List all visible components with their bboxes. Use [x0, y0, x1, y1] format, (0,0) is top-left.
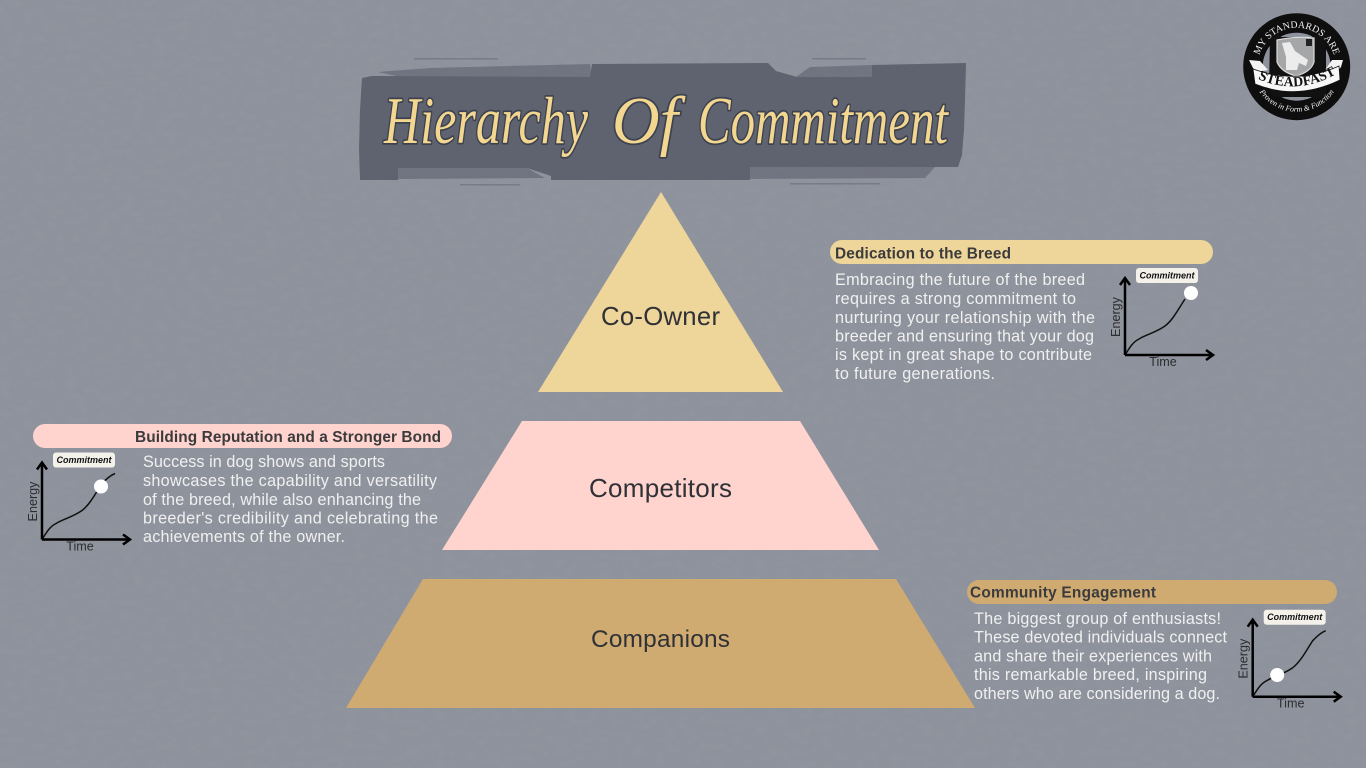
body text: this remarkable breed, inspiring: [974, 666, 1207, 684]
shield with dog: [1277, 37, 1314, 76]
body text: others who are considering a dog.: [974, 685, 1220, 703]
body text: and share their experiences with: [974, 648, 1212, 666]
body text: showcases the capability and versatility: [143, 472, 438, 490]
heading pill: [33, 424, 452, 448]
panel: building reputation: [26, 424, 452, 554]
heading pill: [830, 240, 1213, 264]
commitment chart: mid: Time: [66, 540, 94, 554]
commitment chart: high: Commitment: [1139, 270, 1195, 280]
body text: breeder's credibility and celebrating the: [143, 510, 438, 528]
commitment chart: low: Commitment: [1267, 612, 1323, 622]
commitment chart: mid: Energy: [26, 481, 40, 521]
body text: achievements of the owner.: [143, 528, 345, 546]
body text: breeder and ensuring that your dog: [835, 328, 1094, 346]
title text: Commitment: [698, 84, 949, 158]
commitment chart: low: Energy: [1237, 638, 1251, 679]
logo badge: [1243, 13, 1350, 120]
body text: [835, 271, 1095, 383]
commitment chart: low: [1237, 610, 1341, 711]
badge bottom text: Proven in Form & Function: [1259, 90, 1334, 112]
bone shape: [1269, 32, 1326, 99]
commitment chart: mid: [26, 452, 130, 554]
body text: nurturing your relationship with the: [835, 309, 1095, 327]
commitment chart: low: Time: [1277, 697, 1304, 711]
tier: co-owner: Co-Owner: [601, 303, 720, 331]
commitment chart: high: Energy: [1109, 296, 1123, 337]
body text: Success in dog shows and sports: [143, 453, 385, 471]
badge top text: MY STANDARDS ARE: [1253, 21, 1340, 55]
title banner: [359, 58, 966, 186]
heading pill: [967, 580, 1337, 604]
body text: [974, 610, 1228, 703]
body text: of the breed, while also enhancing the: [143, 491, 421, 509]
panel: community engagement: [967, 580, 1341, 711]
body text: Embracing the future of the breed: [835, 271, 1085, 289]
heading pill: Building Reputation and a Stronger Bond: [135, 429, 441, 446]
tier: competitors: Competitors: [589, 473, 732, 503]
commitment chart: mid: Commitment: [56, 455, 112, 465]
commitment chart: high: Time: [1149, 355, 1177, 369]
body text: The biggest group of enthusiasts!: [974, 610, 1221, 628]
title text: Hierarchy: [383, 84, 588, 158]
body text: to future generations.: [835, 365, 995, 383]
tier: competitors: [442, 421, 879, 550]
badge ring: [1243, 13, 1350, 120]
tier: companions: [346, 579, 975, 708]
heading pill: Community Engagement: [970, 584, 1156, 602]
body text: [143, 453, 438, 546]
pyramid: [346, 192, 975, 708]
body text: is kept in great shape to contribute: [835, 346, 1092, 364]
title text: [383, 84, 949, 158]
heading pill: Dedication to the Breed: [835, 246, 1011, 262]
brush stroke: [359, 58, 966, 186]
commitment chart: high: [1109, 268, 1213, 369]
ribbon banner: STEADFAST: [1258, 66, 1334, 86]
body text: requires a strong commitment to: [835, 290, 1076, 308]
tier: companions: Companions: [591, 626, 730, 653]
title text: Of: [612, 84, 686, 158]
tier: co-owner: [538, 192, 783, 392]
panel: dedication to the breed: [830, 240, 1213, 383]
body text: These devoted individuals connect: [974, 628, 1228, 646]
